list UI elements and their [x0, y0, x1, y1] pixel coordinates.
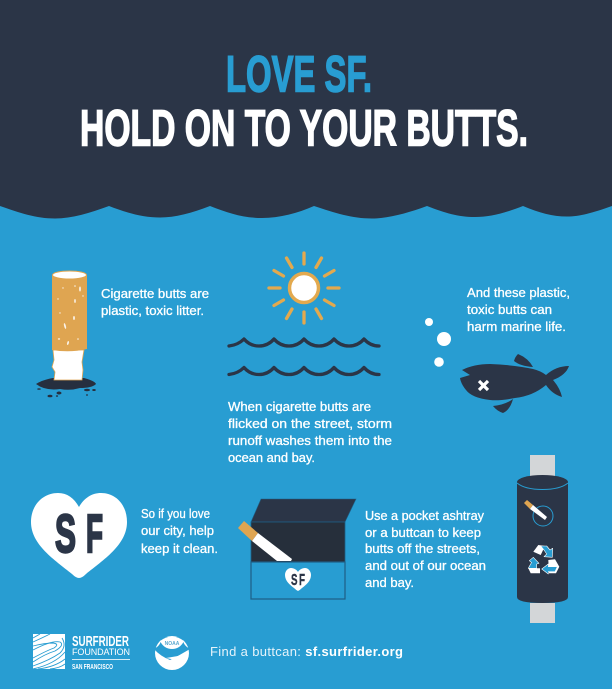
text: cigarette butts are litter — [101, 286, 209, 318]
logo: Surfrider Foundation: SAN FRANCISCO — [72, 662, 113, 671]
icon: street buttcan — [517, 455, 568, 623]
icon: cigarette butt — [36, 271, 96, 397]
icon: SF heart: S — [55, 504, 76, 564]
title — [80, 46, 528, 156]
header wave banner — [0, 0, 612, 218]
icon: waves — [229, 339, 379, 374]
icon: SF heart: F — [86, 504, 103, 564]
icon: dead fish — [460, 354, 569, 413]
text: love your city: keep it clean. — [141, 541, 218, 556]
text: cigarette butts are litter: plastic, toxic litter. — [101, 303, 204, 318]
text: love your city — [141, 506, 218, 556]
text: marine life — [467, 285, 570, 334]
logo: NOAA — [154, 636, 190, 670]
text: pocket ashtray: or a buttcan to keep — [365, 525, 481, 540]
text: cigarette butts are litter: Cigarette butts are — [101, 286, 209, 301]
text: love your city: our city, help — [141, 523, 214, 538]
logo: Surfrider Foundation: SURFRIDER — [72, 633, 129, 650]
icon: sun — [269, 253, 339, 323]
title: LOVE SF. — [226, 46, 372, 102]
icon: bubbles — [425, 318, 451, 367]
icon: buttcan box: S — [291, 572, 298, 589]
text: storm runoff: When cigarette butts are — [228, 399, 371, 414]
icon: recycle arrows — [528, 545, 559, 574]
text: pocket ashtray: and bay. — [365, 575, 414, 590]
text: storm runoff: runoff washes them into the — [228, 433, 392, 448]
logo: Surfrider Foundation — [33, 633, 130, 671]
icon: buttcan box — [238, 499, 356, 599]
text: pocket ashtray: and out of our ocean — [365, 558, 486, 573]
text: marine life: harm marine life. — [467, 319, 566, 334]
text: pocket ashtray — [365, 508, 486, 590]
text: marine life: toxic butts can — [467, 302, 552, 317]
icon: buttcan box: F — [299, 572, 305, 589]
text: pocket ashtray: Use a pocket ashtray — [365, 508, 484, 523]
text: pocket ashtray: butts off the streets, — [365, 541, 480, 556]
text: storm runoff: ocean and bay. — [228, 450, 315, 465]
logo: NOAA: NOAA — [165, 641, 180, 647]
footer call to action: Find a buttcan: sf.surfrider.org — [210, 644, 403, 659]
text: marine life: And these plastic, — [467, 285, 570, 300]
logo: Surfrider Foundation: FOUNDATION — [72, 647, 130, 657]
text: love your city: So if you love — [141, 506, 210, 521]
text: storm runoff: flicked on the street, storm — [228, 416, 392, 431]
text: storm runoff — [228, 399, 392, 465]
icon: SF heart — [31, 493, 127, 578]
